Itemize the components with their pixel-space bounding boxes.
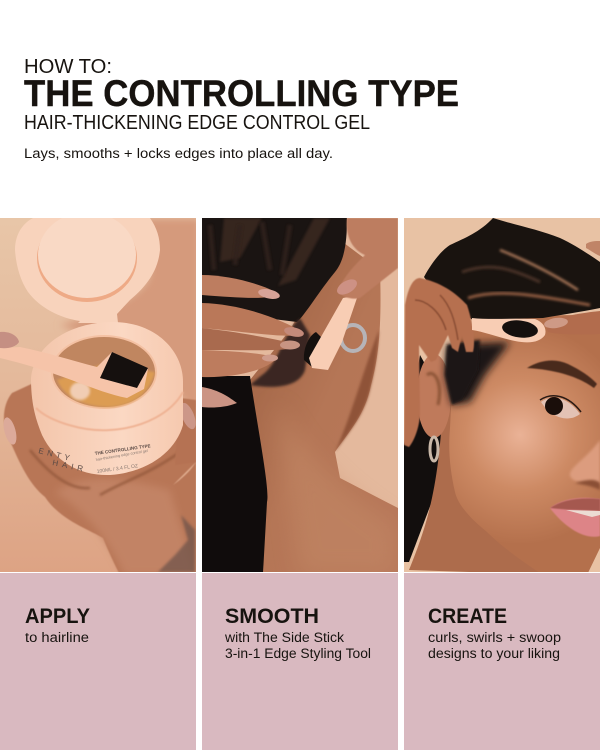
hand on right (338, 218, 398, 299)
ear (417, 354, 451, 438)
icon: open lid (15, 212, 160, 323)
jar label text: ENTY (38, 446, 74, 463)
face (449, 315, 600, 575)
icon: edge brush (472, 318, 546, 342)
eye (540, 396, 581, 418)
nose (570, 440, 600, 485)
step heading: CREATE (428, 605, 507, 628)
panel: apply step (0, 573, 196, 750)
braided hair (424, 218, 600, 320)
hand holding jar (1, 380, 199, 575)
lips (550, 498, 600, 537)
step text: to hairline (25, 630, 89, 645)
panel: apply photo (0, 212, 200, 575)
subheading: HAIR-THICKENING EDGE CONTROL GEL (24, 112, 370, 134)
icon: jar (31, 322, 183, 475)
description: Lays, smooths + locks edges into place all day. (24, 146, 333, 161)
panel: smooth photo (202, 218, 398, 575)
left hand with fingers (404, 278, 474, 447)
step text (428, 630, 561, 661)
icon: styling tool (304, 297, 357, 370)
tattoo (158, 515, 195, 572)
braided hair (202, 218, 347, 387)
eyebrow: how to: HOW TO: (24, 56, 112, 78)
step heading: APPLY (25, 605, 90, 628)
hair back (404, 355, 445, 562)
step text: with The Side Stick (224, 630, 344, 645)
step text (224, 630, 371, 661)
icon: toothbrush tool on jar (0, 332, 148, 398)
jar label text: THE CONTROLLING TYPE (94, 443, 151, 456)
step text: designs to your liking (428, 646, 560, 661)
jar label text: HAIR (52, 458, 88, 474)
panel: smooth step (202, 573, 398, 750)
nails (4, 417, 16, 445)
neck and shoulder (250, 240, 398, 575)
straight hair (202, 376, 267, 573)
title block (24, 56, 459, 161)
step text: curls, swirls + swoop (428, 630, 561, 645)
panel: create step (404, 573, 600, 750)
panel: create photo (404, 218, 600, 575)
jar label text: 100ML / 3.4 FL OZ (96, 463, 138, 475)
earring (430, 437, 438, 461)
blurred arm in background (63, 218, 196, 402)
step heading: SMOOTH (225, 605, 319, 628)
jar label text: hair-thickening edge control gel (95, 449, 148, 462)
jar label text (38, 443, 151, 475)
step text: 3-in-1 Edge Styling Tool (225, 646, 371, 661)
fingers left (202, 275, 305, 408)
right finger (570, 311, 600, 318)
neck (409, 398, 538, 572)
main heading: THE CONTROLLING TYPE (24, 73, 459, 114)
top right fingers (586, 241, 600, 256)
earring (341, 325, 365, 351)
eyebrow (527, 361, 597, 388)
